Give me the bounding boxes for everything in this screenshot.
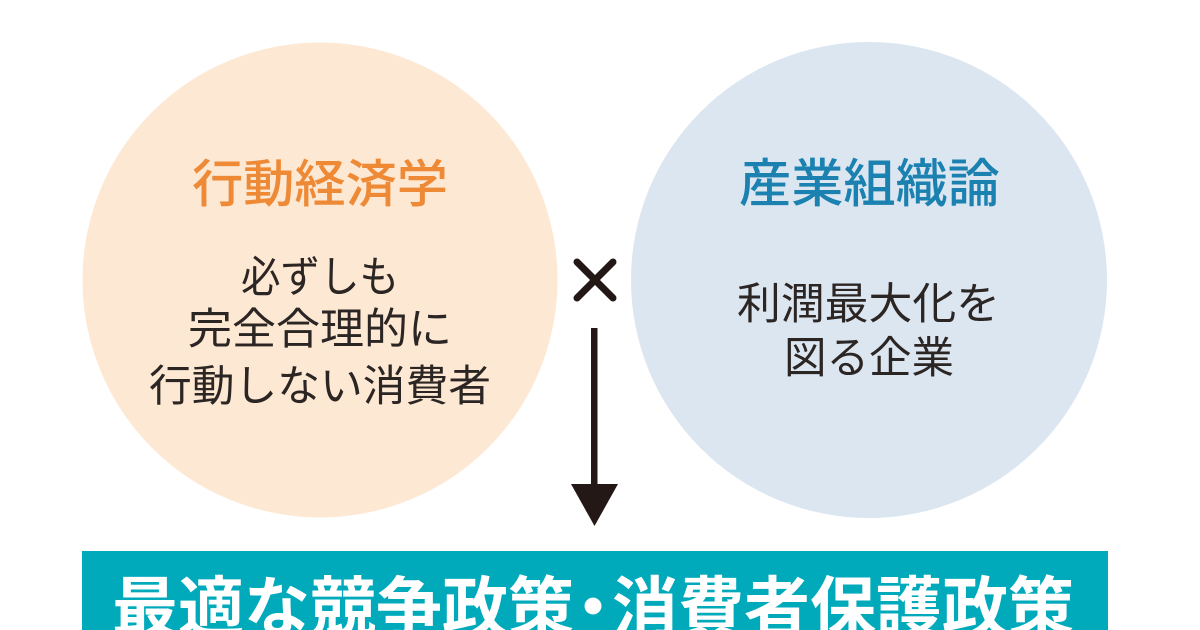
icon: multiplication sign bbox=[577, 262, 613, 298]
text: consumers who do not always act fully rationally bbox=[149, 254, 491, 411]
panel: behavioral economics circle bbox=[82, 42, 558, 518]
text: firms that maximize profit bbox=[737, 281, 1000, 383]
text: consumers who do not always act fully rationally: 完全合理的に bbox=[188, 306, 452, 354]
arrow: down to policy banner bbox=[571, 328, 618, 526]
text: firms that maximize profit: 図る企業 bbox=[784, 335, 954, 383]
banner: optimal competition and consumer protection policy bbox=[82, 551, 1108, 630]
panel: industrial organization circle bbox=[631, 42, 1107, 518]
text: firms that maximize profit: 利潤最大化を bbox=[737, 281, 1000, 329]
text: consumers who do not always act fully rationally: 行動しない消費者 bbox=[149, 363, 491, 411]
banner text bbox=[112, 571, 1074, 630]
text: consumers who do not always act fully rationally: 必ずしも bbox=[241, 254, 399, 302]
heading: industrial organization: 産業組織論 bbox=[739, 156, 1000, 214]
heading: behavioral economics: 行動経済学 bbox=[192, 156, 448, 213]
